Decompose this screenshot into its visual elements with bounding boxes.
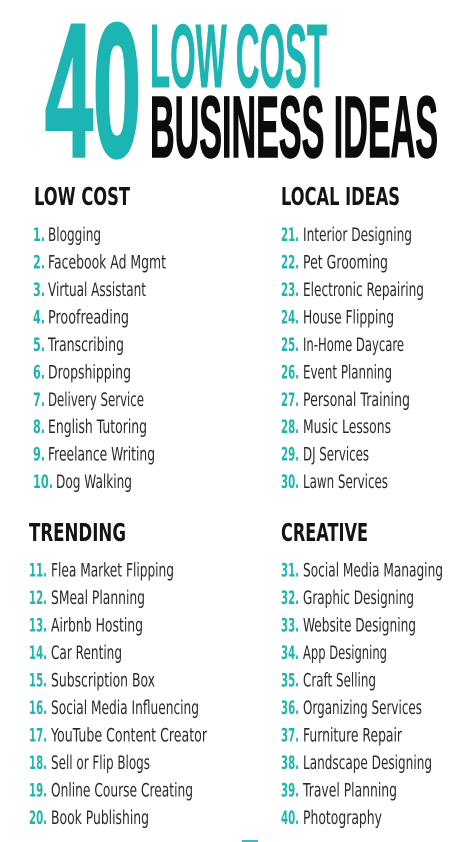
item 32: Graphic Designing — [303, 588, 414, 609]
item 5: Transcribing — [47, 335, 124, 356]
item 24: 24. — [281, 308, 299, 328]
item 38 — [281, 753, 432, 774]
item 35 — [281, 670, 376, 692]
item 27: Personal Training — [303, 390, 410, 411]
item 31: 31. — [281, 560, 299, 582]
item 14 — [29, 643, 122, 664]
item 11 — [29, 560, 174, 582]
item 37: 37. — [281, 726, 299, 746]
item 39: 39. — [281, 780, 299, 802]
item 36 — [281, 698, 422, 719]
item 24: House Flipping — [303, 308, 394, 328]
item 20 — [29, 808, 149, 829]
item 25: 25. — [281, 335, 299, 356]
item 7 — [33, 390, 144, 411]
item 25 — [281, 335, 404, 356]
item 15: Subscription Box — [51, 670, 155, 692]
item 4: 4. — [33, 308, 45, 328]
item 4: Proofreading — [48, 308, 129, 328]
item 33: Website Designing — [303, 616, 416, 636]
item 5 — [33, 335, 124, 356]
item 35: 35. — [281, 670, 299, 692]
item 28: Music Lessons — [303, 417, 391, 438]
item 5: 5. — [33, 335, 45, 356]
item 39 — [281, 780, 397, 802]
item 13: Airbnb Hosting — [51, 616, 143, 636]
item 28 — [281, 417, 391, 438]
item 34: App Designing — [303, 643, 387, 664]
item 7: 7. — [33, 390, 45, 411]
heading: local ideas: LOCAL IDEAS — [281, 182, 400, 211]
item 19: 19. — [29, 780, 47, 802]
item 39: Travel Planning — [302, 780, 397, 802]
item 3: Virtual Assistant — [48, 280, 146, 301]
item 36: 36. — [281, 698, 299, 719]
item 14: 14. — [29, 643, 47, 664]
panel: creative — [281, 518, 443, 829]
item 17: YouTube Content Creator — [50, 726, 207, 746]
item 1: 1. — [33, 225, 45, 246]
item 30: 30. — [281, 472, 299, 493]
item 9 — [33, 444, 155, 466]
item 8: 8. — [33, 417, 45, 438]
item 2: 2. — [33, 252, 45, 274]
item 38: 38. — [281, 753, 299, 774]
item 26: Event Planning — [303, 362, 392, 384]
item 29 — [281, 444, 369, 466]
item 8 — [33, 417, 147, 438]
item 16: Social Media Influencing — [51, 698, 199, 719]
item 22: 22. — [281, 252, 299, 274]
item 19 — [29, 780, 193, 802]
item 34: 34. — [281, 643, 299, 664]
item 1: Blogging — [48, 225, 101, 246]
item 8: English Tutoring — [48, 417, 147, 438]
panel: low cost — [33, 182, 166, 493]
item 11: Flea Market Flipping — [51, 560, 174, 582]
item 19: Online Course Creating — [51, 780, 193, 802]
item 10: 10. — [33, 472, 53, 493]
item 40: Photography — [303, 808, 382, 829]
item 12 — [29, 588, 145, 609]
item 32 — [281, 588, 414, 609]
item 7: Delivery Service — [48, 390, 144, 411]
heading: creative: CREATIVE — [281, 518, 368, 547]
item 6: 6. — [33, 362, 45, 384]
heading: trending: TRENDING — [29, 518, 126, 547]
title — [45, 0, 438, 197]
item 13 — [29, 616, 143, 636]
item 29: 29. — [281, 444, 299, 466]
item 9: 9. — [33, 444, 45, 466]
item 18 — [29, 753, 150, 774]
item 24 — [281, 308, 394, 328]
item 6: Dropshipping — [48, 362, 131, 384]
item 40 — [281, 808, 382, 829]
item 11: 11. — [29, 560, 47, 582]
item 22 — [281, 252, 388, 274]
item 33 — [281, 616, 416, 636]
item 9: Freelance Writing — [48, 444, 155, 466]
item 6 — [33, 362, 131, 384]
item 27: 27. — [281, 390, 299, 411]
item 21: 21. — [281, 225, 299, 246]
item 18: 18. — [29, 753, 47, 774]
item 21: Interior Designing — [303, 225, 412, 246]
item 27 — [281, 390, 410, 411]
item 40: 40. — [281, 808, 299, 829]
item 35: Craft Selling — [303, 670, 376, 692]
item 32: 32. — [281, 588, 299, 609]
item 12: 12. — [29, 588, 47, 609]
item 2 — [33, 252, 166, 274]
item 17: 17. — [29, 726, 47, 746]
item 14: Car Renting — [51, 643, 122, 664]
item 20: 20. — [29, 808, 47, 829]
item 34 — [281, 643, 387, 664]
item 25: In-Home Daycare — [303, 335, 404, 356]
item 30: Lawn Services — [303, 472, 388, 493]
item 13: 13. — [29, 616, 47, 636]
item 18: Sell or Flip Blogs — [51, 753, 150, 774]
heading: low cost: LOW COST — [34, 182, 130, 211]
item 37 — [281, 726, 402, 746]
item 21 — [281, 225, 412, 246]
item 10: Dog Walking — [56, 472, 132, 493]
item 12: SMeal Planning — [51, 588, 145, 609]
item 3 — [33, 280, 146, 301]
item 2: Facebook Ad Mgmt — [48, 252, 166, 274]
item 10 — [33, 472, 132, 493]
item 26: 26. — [281, 362, 299, 384]
item 4 — [33, 308, 129, 328]
item 33: 33. — [281, 616, 299, 636]
item 22: Pet Grooming — [303, 252, 388, 274]
item 29: DJ Services — [303, 444, 369, 466]
item 23: 23. — [281, 280, 299, 301]
item 1 — [33, 225, 101, 246]
item 28: 28. — [281, 417, 299, 438]
item 16 — [29, 698, 199, 719]
item 30 — [281, 472, 388, 493]
item 37: Furniture Repair — [303, 726, 402, 746]
item 20: Book Publishing — [51, 808, 149, 829]
item 16: 16. — [29, 698, 47, 719]
panel: trending — [29, 518, 207, 829]
item 23 — [281, 280, 424, 301]
item 26 — [281, 362, 392, 384]
item 15: 15. — [29, 670, 47, 692]
panel: local ideas — [281, 182, 424, 493]
item 17 — [29, 726, 207, 746]
item 3: 3. — [33, 280, 45, 301]
item 15 — [29, 670, 155, 692]
bottom teal marker — [242, 840, 258, 842]
